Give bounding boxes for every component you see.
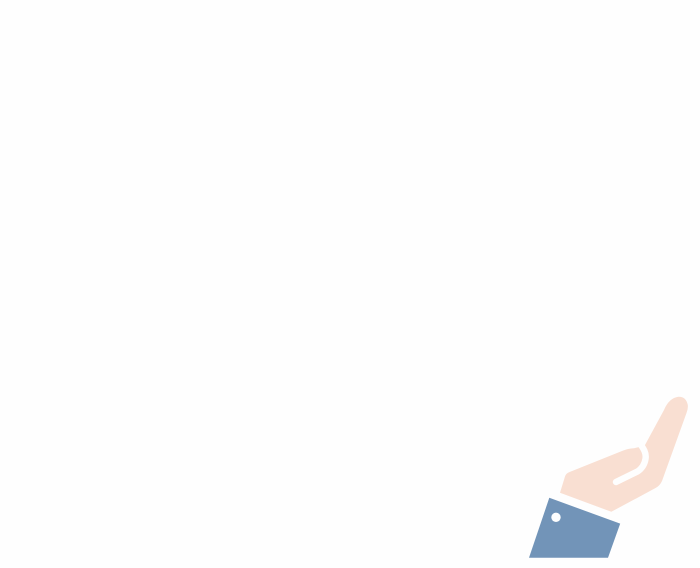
icon: sleeve button xyxy=(551,513,561,522)
icon: thumb outline xyxy=(616,442,646,482)
icon: peach hand xyxy=(560,397,688,512)
icon: blue sleeve xyxy=(529,498,620,558)
